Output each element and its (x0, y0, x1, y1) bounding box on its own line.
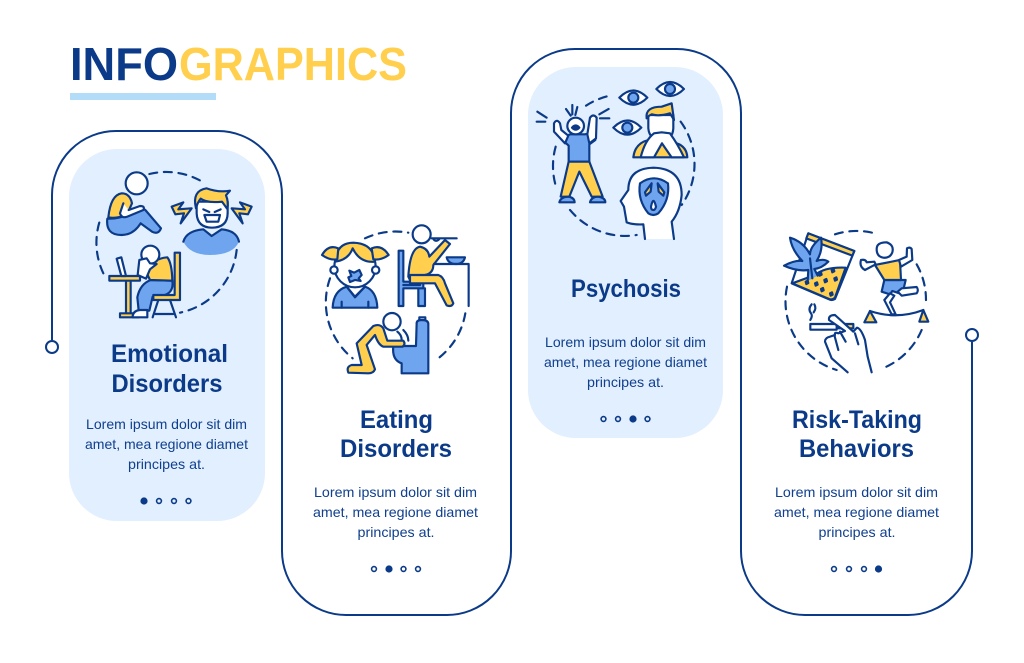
text block: psychosis: principes at. (587, 374, 664, 390)
icon: risk-taking behaviors (784, 231, 928, 372)
text block: psychosis: amet, mea regione diamet (544, 354, 707, 370)
text block: psychosis (544, 334, 707, 390)
panel: emotional disorders background (69, 149, 265, 521)
text block: risk-taking behaviors: principes at. (818, 524, 896, 540)
text block: eating disorders: principes at. (358, 524, 434, 540)
pagination dots: step 3 (601, 416, 650, 422)
heading: emotional disorders (111, 340, 228, 398)
icon: eating disorders (322, 225, 469, 373)
text block: eating disorders (313, 484, 478, 540)
text block: psychosis: Lorem ipsum dolor sit dim (545, 334, 706, 350)
text block: emotional disorders: principes at. (128, 456, 205, 472)
heading: psychosis: Psychosis (571, 275, 681, 303)
title (70, 38, 407, 90)
panel: psychosis background (528, 67, 723, 438)
pagination dots: step 4 (832, 566, 881, 572)
icon: psychosis (537, 82, 695, 239)
heading: risk-taking behaviors (792, 406, 922, 463)
connected timeline outline (46, 49, 978, 615)
heading: eating disorders: Eating (360, 406, 433, 434)
heading: emotional disorders: Emotional (111, 340, 228, 368)
heading: emotional disorders: Disorders (112, 370, 222, 398)
pagination dots: step 2 (372, 566, 420, 572)
heading: eating disorders: Disorders (340, 435, 452, 463)
title: INFO (70, 38, 178, 90)
text block: emotional disorders: amet, mea regione diamet (85, 436, 248, 452)
text block: eating disorders: Lorem ipsum dolor sit dim (314, 484, 477, 500)
pagination dots: step 1 (141, 498, 191, 504)
icon: emotional disorders (96, 172, 252, 317)
heading: risk-taking behaviors: Behaviors (799, 435, 914, 463)
text block: eating disorders: amet, mea regione diamet (313, 504, 478, 520)
title: GRAPHICS (179, 38, 407, 90)
title underline bar (70, 93, 216, 100)
text block: emotional disorders (85, 416, 248, 472)
text block: risk-taking behaviors (774, 484, 939, 540)
text block: risk-taking behaviors: Lorem ipsum dolor sit dim (775, 484, 938, 500)
text block: risk-taking behaviors: amet, mea regione diamet (774, 504, 939, 520)
heading: eating disorders (340, 406, 452, 463)
heading: risk-taking behaviors: Risk-Taking (792, 406, 922, 434)
text block: emotional disorders: Lorem ipsum dolor sit dim (86, 416, 247, 432)
